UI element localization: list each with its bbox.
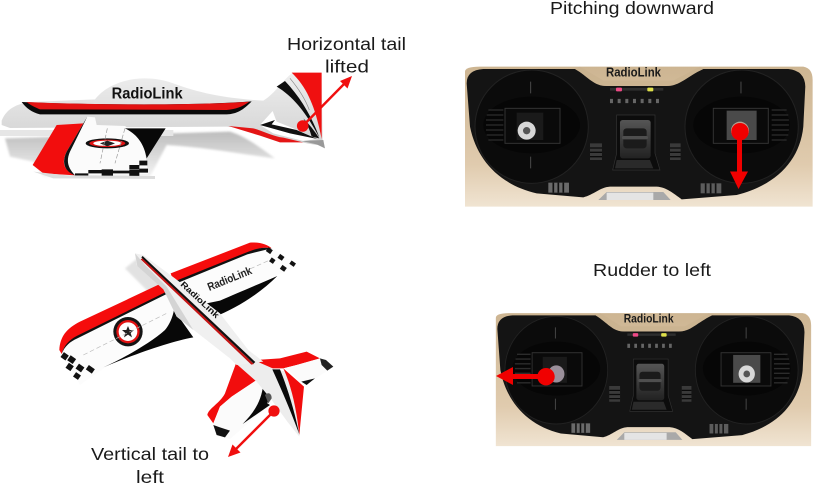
gimbal ribs <box>486 110 789 140</box>
logo: RadioLink on fuselage: RadioLink <box>112 85 183 102</box>
fuselage <box>135 253 263 365</box>
arrow: tail lifted <box>297 76 352 132</box>
center switch <box>630 359 673 411</box>
logo: RadioLink: RadioLink <box>606 65 662 80</box>
arrow: stick down <box>730 123 749 189</box>
tail <box>207 347 334 439</box>
wing <box>33 123 83 175</box>
tail fin <box>228 73 325 148</box>
center switch <box>613 115 660 170</box>
logo: RadioLink: RadioLink <box>624 311 674 326</box>
arrow: stick left <box>496 367 555 385</box>
transmitter: top panel <box>465 65 813 207</box>
logo: RadioLink on wing: RadioLink <box>206 265 254 294</box>
label: horizontal tail lifted <box>287 34 406 76</box>
logo: RadioLink on fuselage: RadioLink <box>179 279 222 320</box>
illustration: side view airplane <box>0 73 325 179</box>
transmitter: bottom panel <box>496 311 811 446</box>
wing <box>59 242 297 385</box>
illustration: top view airplane <box>59 242 334 439</box>
stripe <box>22 101 252 114</box>
label: horizontal tail lifted: Horizontal tail <box>287 34 406 54</box>
gimbal ribs <box>515 354 790 383</box>
heading: rudder to left: Rudder to left <box>593 260 711 280</box>
label: vertical tail to left: Vertical tail to <box>91 444 209 464</box>
arrow: tail to left <box>228 405 280 457</box>
checker pattern <box>60 247 296 380</box>
checker pattern <box>75 161 148 176</box>
label: vertical tail to left <box>91 444 209 487</box>
label: horizontal tail lifted: lifted <box>325 56 369 76</box>
label: vertical tail to left: left <box>136 467 164 487</box>
